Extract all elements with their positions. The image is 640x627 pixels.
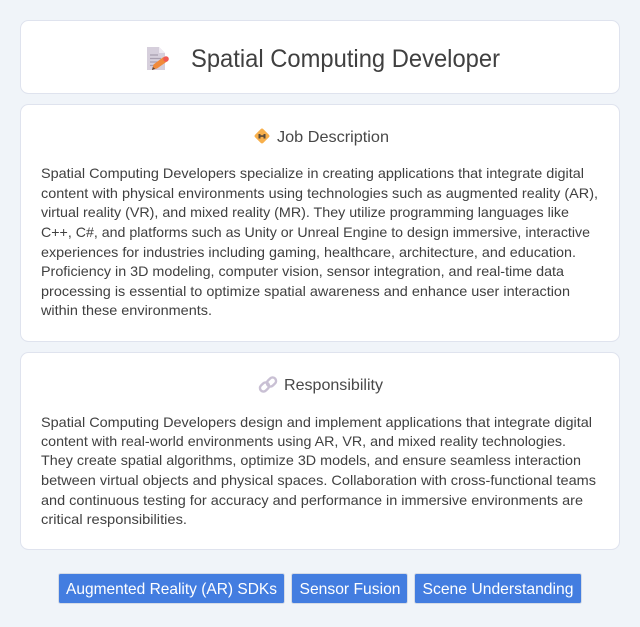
title: Spatial Computing Developer [191, 45, 500, 73]
panel: responsibility [20, 352, 620, 550]
job description text: C++, C#, and platforms such as Unity or Unreal Engine to design immersive, interactive [41, 224, 590, 240]
tag: Scene Understanding: Scene Understanding [422, 581, 574, 598]
job description text: processing is essential to optimize spatial awareness and enhance user interaction [41, 283, 570, 299]
icon: document with pencil [147, 47, 169, 70]
tag: Augmented Reality (AR) SDKs: Augmented Reality (AR) SDKs [66, 581, 277, 598]
tag: Sensor Fusion: Sensor Fusion [300, 581, 400, 598]
responsibility text [41, 414, 596, 527]
responsibility text: and continuous testing for accuracy and performance in immersive environments are [41, 492, 583, 508]
job description text: Spatial Computing Developers specialize in creating applications that integrate digital [41, 165, 584, 181]
panel: title card [20, 20, 620, 94]
job description text: content with physical environments using technologies such as augmented reality (AR), [41, 185, 598, 201]
job description text: within these environments. [40, 302, 212, 318]
heading: responsibility: Responsibility [284, 377, 383, 394]
responsibility text: critical responsibilities. [41, 511, 187, 527]
job description text [40, 165, 598, 318]
heading: job description: Job Description [277, 129, 389, 146]
responsibility text: content with real-world environments using AR, VR, and mixed reality technologies. [41, 433, 566, 449]
responsibility text: They create spatial algorithms, optimize 3D models, and ensure seamless interaction [41, 452, 581, 468]
tag: Scene Understanding [414, 574, 582, 604]
icon: link [258, 376, 278, 393]
job description text: Proficiency in 3D modeling, computer vision, sensor integration, and real-time data [41, 263, 564, 279]
job description text: virtual reality (VR), and mixed reality (MR). They utilize programming languages like [41, 204, 569, 220]
responsibility text: between virtual objects and physical spaces. Collaboration with cross-functional teams [41, 472, 596, 488]
tag: Sensor Fusion [292, 574, 408, 604]
job description text: experiences for industries including gaming, healthcare, architecture, and education. [41, 244, 576, 260]
tag: Augmented Reality (AR) SDKs [58, 574, 284, 604]
panel: job description [20, 104, 620, 342]
responsibility text: Spatial Computing Developers design and implement applications that integrate digital [41, 414, 592, 430]
icon: diamond badge [254, 128, 270, 144]
